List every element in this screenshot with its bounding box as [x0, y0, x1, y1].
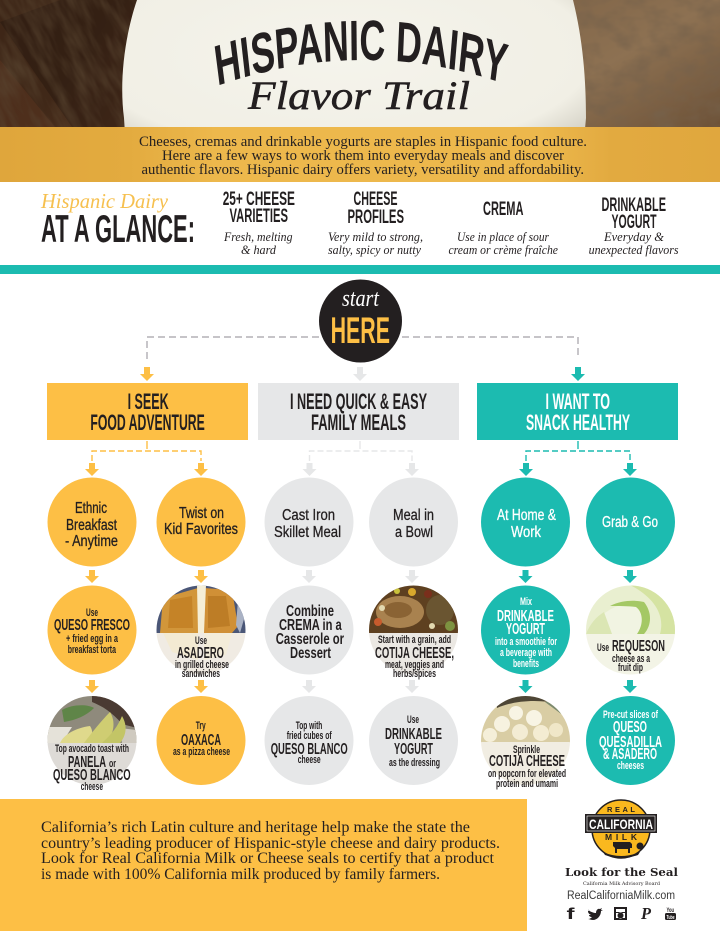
title: HISPANIC DAIRY — [214, 20, 509, 85]
circle: at home and work — [481, 478, 570, 566]
header photo: cheese wheel on wood — [0, 0, 720, 286]
circle: combine crema: Combine — [286, 603, 334, 620]
circle: drinkable yogurt smoothie — [481, 586, 570, 674]
circle: drinkable yogurt dressing: YOGURT — [394, 741, 433, 758]
circle: asadero with grilled cheese photo — [156, 585, 246, 680]
circle: grab and go — [586, 478, 675, 566]
teal divider — [0, 265, 720, 274]
branch connectors: yellow — [92, 441, 201, 461]
top dashed connectors — [147, 337, 578, 359]
arrows above first row of circles — [85, 463, 637, 476]
look for the seal text: California Milk Advisory Board — [583, 881, 660, 887]
circle: cast iron skillet meal — [264, 478, 354, 566]
circle: ethnic breakfast: - Anytime — [65, 533, 118, 550]
social icons — [566, 904, 676, 923]
branch connectors: gray — [310, 441, 412, 461]
start here badge: start — [342, 286, 380, 312]
circle: queso fresco: Use — [86, 607, 98, 619]
glance item: cheese varieties — [223, 189, 295, 257]
circle: queso quesadilla and asadero: Pre-cut slices of — [603, 709, 658, 721]
circle: oaxaca: as a pizza cheese — [173, 746, 230, 758]
circle: cotija with popcorn photo: Sprinkle — [513, 744, 540, 756]
circle: combine crema: Casserole or — [276, 631, 344, 648]
circle: cotija with rice bowl photo: COTIJA CHEESE, — [375, 645, 454, 662]
circle: queso quesadilla and asadero: QUESO — [613, 719, 647, 736]
arrow: to snack healthy — [571, 367, 585, 381]
circle: drinkable yogurt smoothie: Mix — [520, 596, 533, 608]
glance item: crema: CREMA — [483, 199, 524, 220]
glance item: drinkable yogurt: DRINKABLE — [602, 195, 666, 216]
panel: food adventure: FOOD ADVENTURE — [90, 410, 205, 435]
glance item: cheese profiles: salty, spicy or nutty — [328, 242, 421, 257]
social icons: P — [640, 904, 652, 923]
circle: asadero with grilled cheese photo: ASADERO — [177, 645, 224, 662]
circle: asadero with grilled cheese photo: Use — [195, 635, 207, 647]
circle: queso blanco: cheese — [298, 754, 321, 766]
panel: snack healthy — [477, 383, 678, 440]
circle: requeson with apple photo: Use — [597, 642, 609, 654]
circle: queso quesadilla and asadero — [586, 696, 675, 785]
footer panel — [0, 799, 527, 931]
circle: panela with avocado toast photo — [47, 695, 137, 793]
look for the seal text: Look for the Seal — [565, 865, 679, 879]
circle: drinkable yogurt smoothie: a beverage with — [500, 647, 552, 659]
title: Flavor Trail — [247, 73, 470, 118]
circle: requeson with apple photo: fruit dip — [618, 662, 643, 674]
intro band: authentic flavors. Hispanic dairy offers variety, versatility and affordability. — [142, 162, 584, 178]
circle: drinkable yogurt smoothie: YOGURT — [506, 621, 545, 638]
glance item: cheese profiles: Very mild to strong, — [328, 229, 423, 244]
start here badge — [319, 280, 402, 362]
circle: queso quesadilla and asadero: QUESADILLA — [599, 734, 662, 751]
panel: family meals: FAMILY MEALS — [311, 410, 406, 435]
circle: cotija with rice bowl photo: Start with a grain, add — [378, 634, 451, 646]
circle: panela with avocado toast photo: QUESO BLANCO — [53, 767, 131, 784]
circle: ethnic breakfast: Ethnic — [75, 500, 107, 517]
panel: food adventure: I SEEK — [128, 389, 169, 414]
glance item: cheese varieties: 25+ CHEESE — [223, 189, 295, 210]
circle: drinkable yogurt smoothie: DRINKABLE — [497, 608, 554, 625]
footer panel: country’s leading producer of Hispanic-style cheese and dairy products. — [41, 835, 500, 852]
intro band: Here are a few ways to work them into everyday meals and discover — [162, 148, 564, 164]
circle: cotija with popcorn photo: on popcorn for elevated — [488, 768, 566, 780]
social icons: You — [666, 907, 674, 914]
circle: asadero with grilled cheese photo: in grilled cheese — [175, 659, 229, 671]
circle: meal in a bowl: Meal in — [393, 507, 434, 524]
glance item: drinkable yogurt — [589, 195, 679, 257]
circle: queso fresco: breakfast torta — [68, 644, 117, 656]
look for the seal text: RealCaliforniaMilk.com — [567, 890, 675, 902]
glance item: drinkable yogurt: YOGURT — [612, 212, 657, 233]
circle: twist on kid favorites — [156, 478, 246, 566]
arrow: to family meals — [353, 367, 367, 381]
circle: combine crema: CREMA in a — [279, 617, 342, 634]
circle: panela with avocado toast photo: cheese — [81, 781, 103, 793]
circle: queso quesadilla and asadero: & ASADERO — [603, 746, 657, 763]
circle: oaxaca — [156, 696, 246, 785]
circle: drinkable yogurt smoothie: benefits — [513, 658, 539, 670]
circle: requeson with apple photo — [586, 585, 676, 678]
panel: snack healthy: I WANT TO — [546, 389, 610, 414]
circle: meal in a bowl — [369, 478, 458, 566]
circle: queso blanco: Top with — [296, 720, 322, 732]
circle: queso fresco — [48, 586, 136, 674]
footer panel: California’s rich Latin culture and heritage help make the state the — [41, 819, 470, 836]
at a glance heading: Hispanic Dairy — [40, 189, 169, 213]
circle: panela with avocado toast photo: Top avocado toast with — [55, 743, 129, 755]
circle: twist on kid favorites: Twist on — [179, 505, 224, 522]
glance item: cheese varieties: & hard — [241, 242, 276, 257]
circle: requeson with apple photo: cheese as a — [612, 653, 651, 665]
circle: cotija with popcorn photo — [481, 695, 572, 790]
circle: queso quesadilla and asadero: cheeses — [617, 760, 644, 772]
circle: oaxaca: OAXACA — [181, 732, 221, 749]
panel: family meals — [258, 383, 459, 440]
glance item: crema — [448, 199, 558, 257]
circle: drinkable yogurt dressing: Use — [407, 714, 419, 726]
glance item: cheese profiles — [328, 189, 423, 257]
glance item: drinkable yogurt: unexpected flavors — [589, 242, 679, 257]
glance item: cheese varieties: Fresh, melting — [223, 229, 293, 244]
circle: cotija with rice bowl photo — [369, 585, 459, 680]
intro band — [0, 127, 720, 182]
logo: real california milk seal: CALIFORNIA — [589, 816, 653, 832]
panel: family meals: I NEED QUICK & EASY — [290, 389, 427, 414]
circle: cotija with rice bowl photo: herbs/spices — [393, 668, 436, 680]
glance item: drinkable yogurt: Everyday & — [603, 229, 665, 244]
circle: drinkable yogurt smoothie: into a smoothie for — [495, 636, 557, 648]
glance item: cheese profiles: CHEESE — [354, 189, 398, 210]
circle: cotija with rice bowl photo: meat, veggies and — [385, 659, 444, 671]
logo: real california milk seal — [585, 800, 657, 858]
circle: at home and work: Work — [511, 524, 541, 541]
circle: queso blanco: fried cubes of — [287, 730, 332, 742]
logo: real california milk seal: MILK — [605, 832, 638, 842]
circle: twist on kid favorites: Kid Favorites — [164, 521, 238, 538]
glance item: cheese profiles: PROFILES — [348, 207, 404, 228]
logo: real california milk seal: REAL — [607, 805, 635, 814]
footer panel: is made with 100% California milk produced by family farmers. — [41, 866, 440, 883]
circle: drinkable yogurt dressing: DRINKABLE — [385, 726, 442, 743]
footer panel: Look for Real California Milk or Cheese seals to certify that a product — [41, 850, 495, 867]
circle: queso blanco — [264, 696, 354, 785]
circle: cotija with popcorn photo: protein and umami — [496, 778, 558, 790]
circle: cotija with popcorn photo: COTIJA CHEESE — [489, 753, 565, 770]
circle: oaxaca: Try — [196, 720, 206, 732]
at a glance heading: AT A GLANCE: — [41, 208, 195, 251]
at a glance heading — [40, 189, 195, 251]
arrows between first and second rows — [85, 570, 637, 583]
circle: at home and work: At Home & — [497, 507, 557, 524]
circle: panela with avocado toast photo: PANELA — [68, 754, 106, 771]
circle: asadero with grilled cheese photo: sandwiches — [182, 668, 220, 680]
circle: panela with avocado toast photo: or — [109, 758, 116, 770]
circle: drinkable yogurt dressing — [369, 696, 458, 785]
branch connectors: teal — [526, 441, 630, 461]
circle: combine crema: Dessert — [290, 645, 331, 662]
intro band: Cheeses, cremas and drinkable yogurts are staples in Hispanic food culture. — [139, 134, 587, 150]
circle: ethnic breakfast: Breakfast — [66, 517, 118, 534]
arrow: to food adventure — [140, 367, 154, 381]
look for the seal text — [565, 865, 679, 902]
circle: meal in a bowl: a Bowl — [395, 524, 433, 541]
circle: queso blanco: QUESO BLANCO — [271, 741, 348, 758]
social icons: Tube — [666, 915, 674, 921]
arrows between second and third rows — [85, 680, 637, 693]
glance item: cheese varieties: VARIETIES — [230, 206, 288, 227]
circle: grab and go: Grab & Go — [602, 514, 658, 531]
start here badge: HERE — [331, 310, 390, 351]
circle: queso fresco: QUESO FRESCO — [54, 617, 130, 634]
circle: queso fresco: + fried egg in a — [66, 633, 119, 645]
panel: snack healthy: SNACK HEALTHY — [526, 410, 630, 435]
circle: requeson with apple photo: REQUESON — [612, 638, 665, 655]
circle: combine crema — [264, 586, 354, 674]
panel: food adventure — [47, 383, 248, 440]
glance item: crema: Use in place of sour — [457, 229, 550, 244]
glance item: crema: cream or crème fraîche — [448, 242, 558, 257]
circle: cast iron skillet meal: Skillet Meal — [274, 524, 341, 541]
circle: ethnic breakfast — [48, 478, 136, 566]
circle: cast iron skillet meal: Cast Iron — [282, 507, 335, 524]
social icons: f — [566, 906, 576, 923]
circle: drinkable yogurt dressing: as the dressing — [389, 757, 440, 769]
